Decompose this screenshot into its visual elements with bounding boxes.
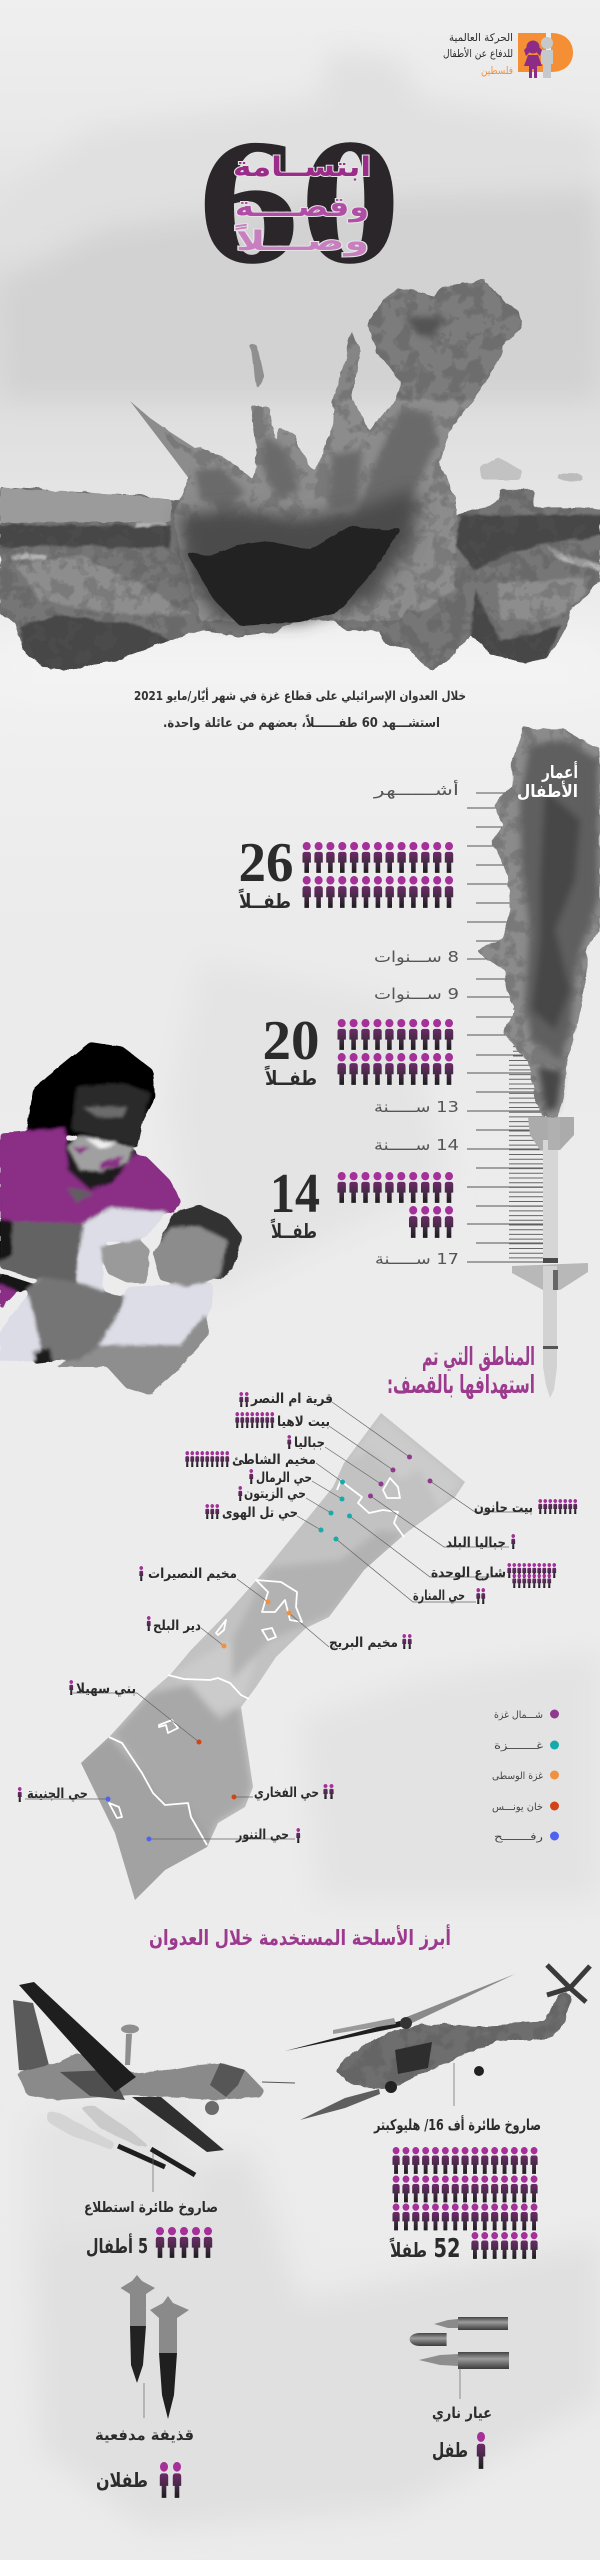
- stat: 20 children: [262, 1010, 453, 1090]
- blanket fold: [77, 1208, 167, 1307]
- left sleeve: [0, 1277, 43, 1362]
- white borders: [109, 1478, 404, 1845]
- shirt: [0, 1128, 182, 1310]
- drone tail: [13, 2000, 51, 2073]
- stat: 26 children: [238, 832, 453, 913]
- arm: [0, 1222, 83, 1285]
- smoke core: [186, 526, 402, 626]
- title: 60 with stacked words: وصـــلاً: [234, 223, 369, 257]
- drone fuselage: [17, 2053, 264, 2100]
- label: shati camp: مخيم الشاطئ: [232, 1452, 316, 1468]
- label: tal al-hawa: [205, 1504, 298, 1521]
- gaza strip map: [25, 1402, 532, 1910]
- leader: bullets: [459, 2368, 461, 2399]
- ages title: الأطفال: [517, 781, 578, 802]
- ages title: [517, 761, 578, 802]
- drone missile count: 5 أطفال: [86, 2232, 148, 2258]
- dots: north gaza: [368, 1454, 432, 1498]
- label: fukhari: حي الفخاري: [254, 1785, 319, 1801]
- shell one: [120, 2275, 155, 2383]
- label: bani suheila: بني سهيلا: [76, 1681, 136, 1697]
- strip shape: [81, 1413, 465, 1900]
- label: beit lahia: بيت لاهيا: [277, 1414, 330, 1430]
- legend: gaza: غـــــــزة: [494, 1741, 543, 1752]
- label: manara: حي المنارة: [413, 1588, 465, 1604]
- bullet top: [434, 2317, 508, 2330]
- title: 60 with stacked words: وقصــــة: [235, 192, 369, 223]
- drone wing upper: [19, 1982, 136, 2092]
- bullet middle: [410, 2333, 447, 2346]
- stat: 20 children: طفــلاً: [265, 1065, 317, 1090]
- illustration: woman in mask carrying child: [0, 1042, 243, 1395]
- face mask: [68, 1137, 133, 1172]
- intro text: [134, 687, 466, 731]
- helicopter missile: [300, 2089, 380, 2120]
- logo: [443, 32, 573, 78]
- explosion over city: [0, 280, 600, 672]
- map legend: [492, 1710, 559, 1843]
- legend: north gaza: شـــمال غزة: [494, 1710, 543, 1721]
- label: umm al-nasr: قرية ام النصر: [250, 1391, 333, 1407]
- live ammunition count: طفل: [432, 2438, 468, 2462]
- drone nose probe: [262, 2082, 295, 2083]
- exhaust trails: [46, 2106, 150, 2150]
- logo text: الحركة العالمية: [449, 32, 513, 44]
- weapons heading: أبرز الأسلحة المستخدمة خلال العدوان: [149, 1923, 451, 1950]
- drone antenna: [121, 2024, 139, 2065]
- label: rimal: [249, 1469, 312, 1486]
- wheels: [385, 2066, 484, 2093]
- age labels: أشــــــهر: [373, 780, 459, 799]
- label: beit lahia: [235, 1412, 330, 1430]
- smoke plume: [160, 280, 522, 620]
- legend: rafah: رفـــــــح: [494, 1832, 543, 1843]
- dots: gaza: [318, 1480, 352, 1542]
- label: jabalia al-balad: جباليا البلد: [446, 1535, 506, 1551]
- label: deir al-balah: دير البلح: [153, 1618, 201, 1634]
- stat: 20 children: 20: [262, 1010, 320, 1072]
- drone shaded panel: [60, 2070, 125, 2100]
- stat: 52 children: 52: [434, 2234, 460, 2264]
- bullets: [410, 2317, 509, 2399]
- smoke dark tones: [178, 490, 420, 622]
- label: beit hanoun: بيت حانون: [474, 1500, 533, 1516]
- age labels: 13 ســـــنة: [374, 1098, 459, 1116]
- lower blanket: [97, 1283, 213, 1360]
- live ammunition label: عيار ناري: [432, 2404, 492, 2423]
- artillery shell count: طفلان: [96, 2468, 148, 2492]
- helicopter cabin shade: [395, 2042, 432, 2074]
- shell two: [150, 2296, 189, 2419]
- face: [72, 1083, 150, 1147]
- ruler ticks: [467, 793, 545, 1262]
- leader: shells: [143, 2383, 145, 2418]
- intro text: خلال العدوان الإسرائيلي على قطاع غزة في شهر أيّار/مايو 2021: [134, 687, 466, 703]
- drone missile label: صاروخ طائرة استطلاع: [84, 2200, 218, 2216]
- label: beit hanoun: [474, 1499, 577, 1516]
- age labels: [373, 780, 459, 1268]
- smoke column: [477, 727, 600, 1117]
- missile: [512, 1117, 588, 1398]
- stat: 52 children: [390, 2147, 538, 2264]
- rotor blades: [285, 1974, 515, 2051]
- label: jabalia: جباليا: [294, 1435, 325, 1451]
- drone pod: [205, 2101, 219, 2115]
- helicopter missile label: صاروخ طائرة أف 16/ هليوكبتر: [373, 2115, 541, 2134]
- artillery shells: [120, 2275, 189, 2419]
- title: 60 with stacked words: 60: [198, 102, 401, 301]
- label: al-wehda street: [431, 1563, 556, 1588]
- age labels: 14 ســـــنة: [374, 1136, 459, 1154]
- stat: 26 children: 26: [238, 832, 294, 894]
- child shoulder: [100, 1240, 150, 1283]
- label: jneina: حي الجنينة: [27, 1786, 88, 1802]
- stat: 14 children: [270, 1163, 453, 1243]
- sky blotches: [249, 343, 583, 481]
- live ammunition count: [432, 2432, 485, 2469]
- child hair: [160, 1205, 243, 1280]
- drone: [13, 1982, 295, 2192]
- leader: helicopter: [453, 2063, 455, 2106]
- stat: 52 children: طفلاً: [390, 2237, 427, 2262]
- helicopter body: [337, 1990, 574, 2087]
- hair: [27, 1042, 155, 1147]
- age labels: 17 ســـــنة: [375, 1250, 459, 1268]
- logo text: فلسطين: [481, 65, 513, 77]
- label: nuseirat camp: مخيم النصيرات: [148, 1566, 237, 1582]
- dots: rafah: [106, 1796, 152, 1842]
- logo mark: [518, 33, 573, 78]
- blanket bottom in gray: [50, 1315, 210, 1395]
- bullet bottom: [419, 2352, 509, 2369]
- dots: central gaza: [222, 1600, 292, 1648]
- logo text: للدفاع عن الأطفال: [443, 47, 513, 60]
- label: tal al-hawa: حي تل الهوى: [222, 1505, 298, 1521]
- distant band: [0, 488, 172, 523]
- strip shading: [75, 1415, 462, 1910]
- ages title: أعمار: [541, 761, 578, 783]
- drone canopy: [210, 2063, 245, 2097]
- legend: khan younis: خان يونـــس: [492, 1802, 543, 1813]
- drone missiles: [118, 2146, 195, 2175]
- hand: [27, 1277, 125, 1360]
- title: 60 with stacked words: ابتســامة: [233, 152, 371, 183]
- stat: 26 children: طفــلاً: [239, 888, 291, 913]
- stat: 14 children: 14: [270, 1163, 320, 1225]
- helicopter: [285, 1965, 590, 2120]
- label: bureij camp: مخيم البريج: [329, 1635, 398, 1651]
- smoke mid tones: [195, 317, 446, 535]
- label: zeitoun: حي الزيتون: [244, 1486, 306, 1502]
- plume left spike tip: [130, 401, 198, 480]
- age labels: 8 ســـنوات: [374, 948, 459, 966]
- dots: khan younis: [196, 1740, 236, 1800]
- label: al-wehda street: شارع الوحدة: [431, 1565, 506, 1581]
- drone wing lower: [132, 2097, 224, 2152]
- legend: central gaza: غزة الوسطى: [492, 1771, 543, 1782]
- intro text: استشـــهد 60 طفــــــلاً، بعضهم من عائلة واحدة.: [163, 714, 440, 731]
- stat: 14 children: طفــلاً: [271, 1218, 317, 1243]
- leader: drone: [152, 2153, 154, 2192]
- child face: [153, 1227, 227, 1287]
- label: shati camp: [185, 1451, 316, 1468]
- drone missile count: [86, 2227, 212, 2258]
- logo text: [443, 32, 513, 77]
- artillery shell count: [96, 2462, 181, 2498]
- map labels with child icons: [18, 1391, 577, 1843]
- label: rimal: حي الرمال: [256, 1470, 312, 1486]
- age labels: 9 ســـنوات: [374, 985, 459, 1003]
- tail rotor: [547, 1965, 590, 2002]
- artillery shell label: قذيفة مدفعية: [95, 2426, 194, 2444]
- city ground: [0, 487, 600, 672]
- label: tannour: حي التنور: [235, 1827, 289, 1843]
- leader lines: [25, 1402, 532, 1839]
- map heading: [387, 1342, 535, 1400]
